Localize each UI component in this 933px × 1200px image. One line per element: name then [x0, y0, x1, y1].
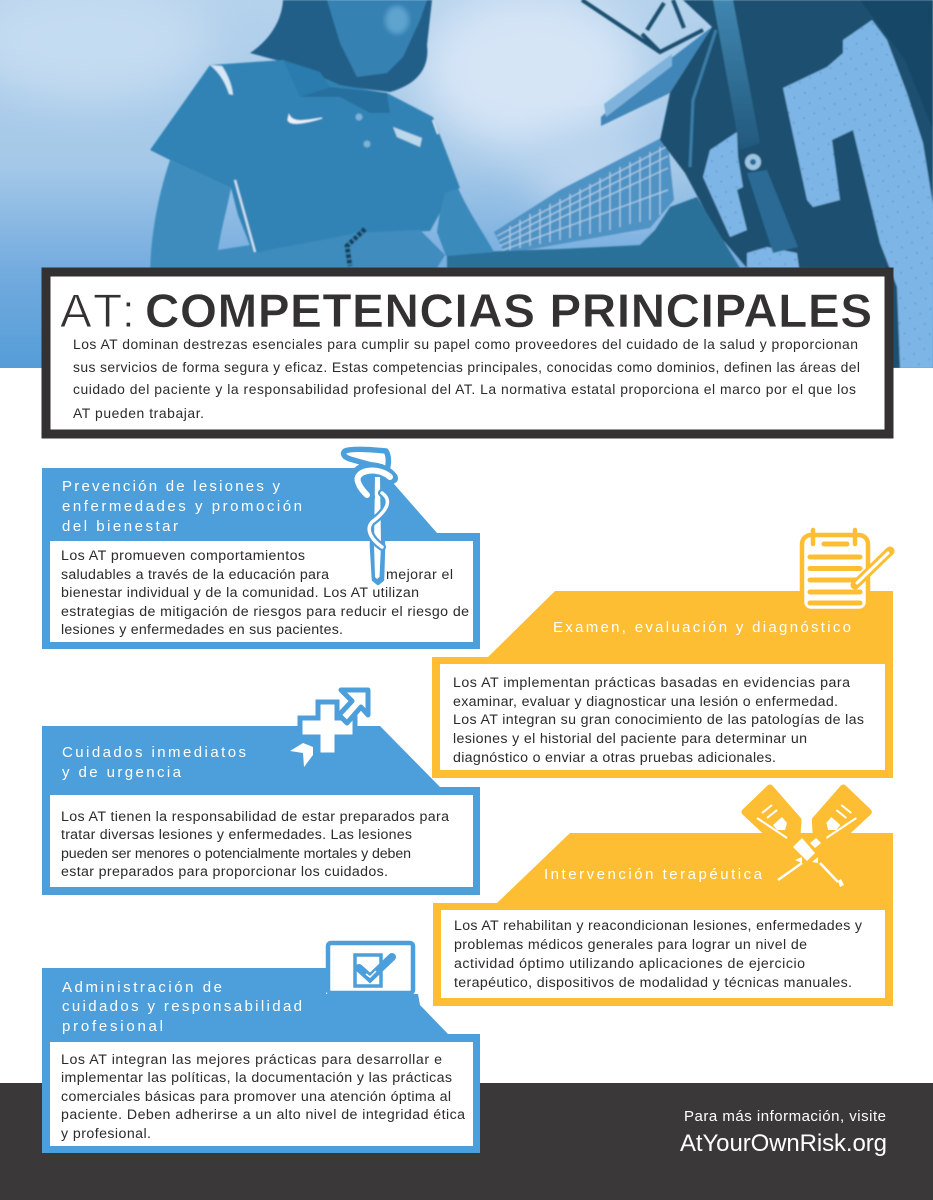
body: emergency care: pueden ser menores o potencialmente mortales y deben — [61, 846, 411, 862]
heading: therapeutic intervention: Intervención terapéutica — [544, 866, 763, 883]
body: administration: comerciales básicas para promover una atención óptima al — [61, 1089, 451, 1105]
body: prevention: bienestar individual y de la comunidad. Los AT utilizan — [61, 585, 419, 601]
heading: examination: Examen, evaluación y diagnóstico — [553, 619, 851, 636]
heading: emergency care — [62, 744, 246, 781]
woman — [250, 0, 432, 92]
icon: clipboard and pencil — [802, 530, 890, 611]
right crutch head — [815, 788, 868, 841]
heading: administration: Administración de — [62, 979, 222, 996]
left crutch head — [745, 788, 798, 841]
body: emergency care — [61, 809, 449, 880]
heading: prevention: enfermedades y promoción — [62, 498, 302, 515]
body: examination: diagnóstico o enviar a otras pruebas adicionales. — [453, 750, 776, 766]
body: therapeutic intervention — [454, 918, 863, 991]
body: administration: implementar las políticas, la documentación y las prácticas — [61, 1070, 452, 1086]
body: therapeutic intervention: terapéutico, dispositivos de modalidad y técnicas manuales. — [454, 975, 852, 991]
intro panel — [46, 272, 889, 434]
body: examination: examinar, evaluar y diagnosticar una lesión o enfermedad. — [453, 694, 838, 710]
body: therapeutic intervention: problemas médicos generales para lograr un nivel de — [454, 937, 807, 953]
panel: prevention — [42, 449, 480, 649]
heading: prevention: Prevención de lesiones y — [62, 478, 280, 495]
icon: medical cross with arrows — [290, 690, 368, 767]
body: examination: Los AT integran su gran conocimiento de las patologías de las — [453, 712, 864, 728]
panel: therapeutic intervention — [433, 788, 893, 1006]
body: administration: y profesional. — [61, 1126, 151, 1142]
body: emergency care: tratar diversas lesiones y enfermedades. Las lesiones — [61, 827, 412, 843]
footer text: AtYourOwnRisk.org — [680, 1130, 887, 1157]
heading: administration: cuidados y responsabilidad — [62, 998, 302, 1015]
body: prevention: lesiones y enfermedades en sus pacientes. — [61, 622, 343, 638]
helmet strap — [713, 0, 760, 150]
footer text — [680, 1108, 887, 1157]
body: prevention: Los AT promueven comportamientos — [61, 548, 305, 564]
icon: staff with snake — [344, 449, 392, 584]
body: emergency care: Los AT tienen la responsabilidad de estar preparados para — [61, 809, 449, 825]
intro text: cuidado del paciente y la responsabilidad profesional del AT. La normativa estatal proporciona el marco por el que los — [73, 381, 856, 397]
body: therapeutic intervention: actividad óptimo utilizando aplicaciones de ejercicio — [454, 956, 805, 972]
heading: administration — [62, 979, 302, 1035]
body: prevention — [61, 548, 469, 638]
body: emergency care: estar preparados para proporcionar los cuidados. — [61, 864, 388, 880]
heading: emergency care: y de urgencia — [62, 764, 182, 781]
intro text: sus servicios de forma segura y eficaz. Estas competencias principales, conocidas como dominios, definen las áreas del — [73, 359, 860, 375]
player torso — [660, 0, 933, 368]
intro text — [73, 336, 860, 421]
footer text: Para más información, visite — [684, 1108, 886, 1125]
heading: prevention: del bienestar — [62, 518, 178, 535]
body: examination — [453, 675, 864, 766]
face mask — [582, 0, 703, 52]
footer band — [0, 1083, 933, 1200]
body: administration: paciente. Deben adherirse a un alto nivel de integridad ética — [61, 1107, 465, 1123]
player arm — [447, 197, 740, 268]
body: examination: lesiones y el historial del paciente para determinar un — [453, 731, 807, 747]
icon: laptop with checkbox — [328, 943, 413, 993]
panel: administration — [42, 943, 480, 1153]
intro text: AT pueden trabajar. — [73, 405, 204, 421]
heading: emergency care: Cuidados inmediatos — [62, 744, 246, 761]
hero photo: athletic trainer and football player — [0, 0, 933, 368]
body: therapeutic intervention: Los AT rehabilitan y reacondicionan lesiones, enfermedades y — [454, 918, 863, 934]
crutch shafts — [778, 838, 844, 887]
panel: examination — [432, 530, 893, 778]
body: prevention: mejorar el — [386, 567, 453, 583]
heading: prevention — [62, 478, 302, 535]
body: administration: Los AT integran las mejores prácticas para desarrollar e — [61, 1052, 442, 1068]
jersey number — [783, 20, 933, 368]
heading: administration: profesional — [62, 1018, 163, 1035]
title: AT: — [60, 285, 135, 338]
panel: emergency care — [42, 690, 480, 895]
body: examination: Los AT implementan prácticas basadas en evidencias para — [453, 675, 850, 691]
icon: crossed crutches — [745, 788, 868, 887]
body: prevention: saludables a través de la educación para — [61, 567, 329, 583]
title: COMPETENCIAS PRINCIPALES — [145, 285, 872, 338]
body: administration — [61, 1052, 465, 1142]
body: prevention: estrategias de mitigación de riesgos para reducir el riesgo de — [61, 604, 469, 620]
intro text: Los AT dominan destrezas esenciales para cumplir su papel como proveedores del cuidado de la salud y proporcionan — [73, 336, 858, 352]
